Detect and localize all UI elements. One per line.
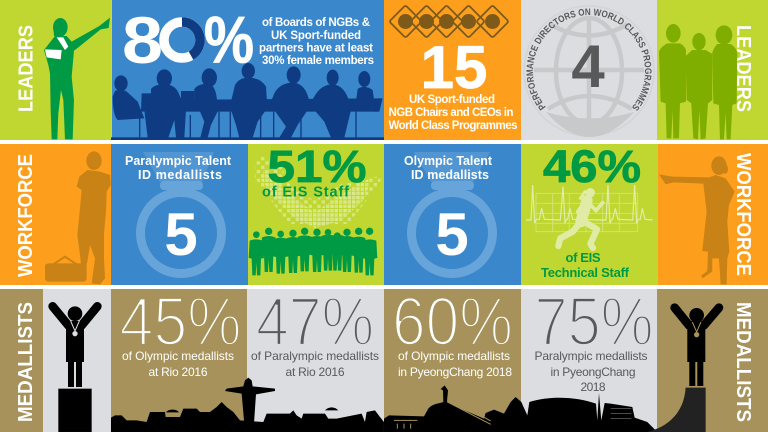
- icon: athlete on curved pedestal: [647, 308, 719, 432]
- icon: athlete on pedestal: [53, 306, 97, 432]
- panel: 47 percent paralympic rio: [247, 283, 384, 432]
- text: olympic talent heading: [404, 154, 493, 182]
- panel: 75 percent paralympic pyeongchang: [521, 283, 657, 432]
- heading: workforce left: WORKFORCE: [15, 154, 37, 277]
- panel: 45 percent olympic rio: [111, 283, 247, 432]
- panel: workforce label left: [0, 144, 111, 285]
- text: boards description: [259, 17, 374, 67]
- stat: 15: 15: [421, 34, 487, 101]
- panel: leaders label right: [657, 0, 768, 140]
- panel: 60 percent olympic pyeongchang: [384, 283, 521, 432]
- text: olympic medallists pyeongchang: of Olympic medallists: [398, 349, 510, 363]
- icon: globe: [524, 6, 654, 137]
- panel: chairs and CEOs 15: [384, 0, 521, 140]
- panel: medallists label right: [647, 289, 768, 432]
- chart: heartbeat grid: [526, 185, 653, 232]
- stat: 60 percent: 60%: [392, 283, 513, 360]
- panel: workforce label right: [658, 144, 768, 285]
- stat: 46 percent: 46%: [543, 141, 641, 192]
- stat: 51 percent: 51%: [268, 141, 366, 192]
- icon: pixel arrow: [255, 156, 381, 228]
- stat: 4: 4: [571, 33, 605, 100]
- icon: pyeongchang skyline: [384, 385, 657, 432]
- icon: three women silhouettes: [659, 24, 737, 139]
- text: paralympic medallists rio: [251, 349, 379, 379]
- stat: 75 percent: 75%: [534, 283, 654, 360]
- chart: heartbeat line: [526, 185, 653, 223]
- text: paralympic medallists pyeongchang: Paralympic medallists: [534, 349, 648, 363]
- icon: rio skyline: [111, 378, 384, 432]
- text: chairs description: World Class Programmes: [388, 120, 518, 132]
- row: workforce: [0, 141, 768, 285]
- text: of EIS technical staff: [541, 250, 630, 280]
- text: olympic medallists rio: at Rio 2016: [148, 365, 208, 379]
- stat: 47 percent: 47%: [256, 283, 374, 360]
- stat: 80 percent: [122, 2, 254, 77]
- heading: workforce right: WORKFORCE: [732, 153, 754, 276]
- text: olympic medallists pyeongchang: in PyeongChang 2018: [398, 365, 512, 379]
- text: paralympic medallists pyeongchang: [534, 349, 648, 394]
- stat: 80 percent: 8: [122, 3, 163, 77]
- heading: leaders left: LEADERS: [16, 25, 38, 112]
- icon: medal: [136, 152, 226, 278]
- icon: woman with bag: [45, 151, 111, 284]
- panel: medallists label left: [0, 289, 111, 432]
- icon: woman pointing: [44, 18, 110, 139]
- heading: medallists left: MEDALLISTS: [15, 302, 37, 422]
- panel: 51 percent EIS staff: [248, 141, 384, 285]
- row: leaders: [0, 0, 768, 140]
- panel: boards 80 percent: [111, 0, 384, 140]
- panel: paralympic talent ID: [111, 144, 248, 285]
- text: olympic talent heading: ID medallists: [411, 168, 489, 182]
- icon: boardroom silhouettes: [111, 63, 384, 140]
- text: olympic medallists pyeongchang: [398, 349, 512, 379]
- chart: donut zero: [164, 22, 200, 58]
- panel: olympic talent ID: [384, 144, 521, 285]
- text: performance directors curved: [533, 15, 645, 107]
- heading: medallists right: MEDALLISTS: [732, 302, 754, 422]
- text: olympic medallists rio: of Olympic medallists: [122, 349, 234, 363]
- text: of EIS technical staff: of EIS: [566, 250, 601, 265]
- panel: performance directors 4: PERFORMANCE DIRECTORS ON WORLD CLASS PROGRAMMES: [526, 8, 652, 110]
- icon: five diamond badges: [389, 5, 509, 38]
- icon: woman pointing left: [659, 156, 735, 284]
- icon: medal: [407, 152, 497, 278]
- text: boards description: of Boards of NGBs &: [262, 17, 370, 29]
- text: chairs description: UK Sport-funded: [409, 94, 495, 106]
- text: paralympic medallists pyeongchang: in PyeongChang: [550, 365, 636, 379]
- text: olympic medallists rio: [122, 349, 234, 379]
- text: boards description: 30% female members: [262, 55, 374, 67]
- stat: 80 percent: %: [204, 2, 254, 76]
- text: paralympic medallists pyeongchang: 2018: [580, 380, 606, 394]
- text: of EIS technical staff: Technical Staff: [541, 265, 630, 280]
- stat: 45 percent: 45%: [120, 283, 242, 360]
- text: boards description: UK Sport-funded: [271, 30, 361, 42]
- text: paralympic medallists rio: at Rio 2016: [286, 365, 345, 379]
- text: paralympic talent heading: [125, 154, 232, 182]
- stat: 5: 5: [164, 201, 198, 268]
- text: paralympic medallists rio: of Paralympic medallists: [251, 349, 379, 363]
- text: boards description: partners have at least: [259, 42, 373, 54]
- stat: 5: 5: [435, 201, 469, 268]
- panel: 46 percent technical staff: [521, 141, 658, 285]
- row: medallists: [0, 283, 768, 432]
- text: paralympic talent heading: ID medallists: [138, 168, 222, 182]
- text: chairs description: [388, 94, 518, 132]
- heading: leaders right: LEADERS: [732, 25, 754, 112]
- text: olympic talent heading: Olympic Talent: [404, 154, 493, 168]
- text: of EIS staff: of EIS Staff: [262, 184, 349, 200]
- icon: crowd of staff: [249, 228, 377, 275]
- panel: leaders label left: [0, 0, 111, 140]
- text: chairs description: NGB Chairs and CEOs in: [388, 107, 514, 119]
- text: paralympic talent heading: Paralympic Talent: [125, 154, 232, 168]
- icon: runner: [558, 188, 603, 248]
